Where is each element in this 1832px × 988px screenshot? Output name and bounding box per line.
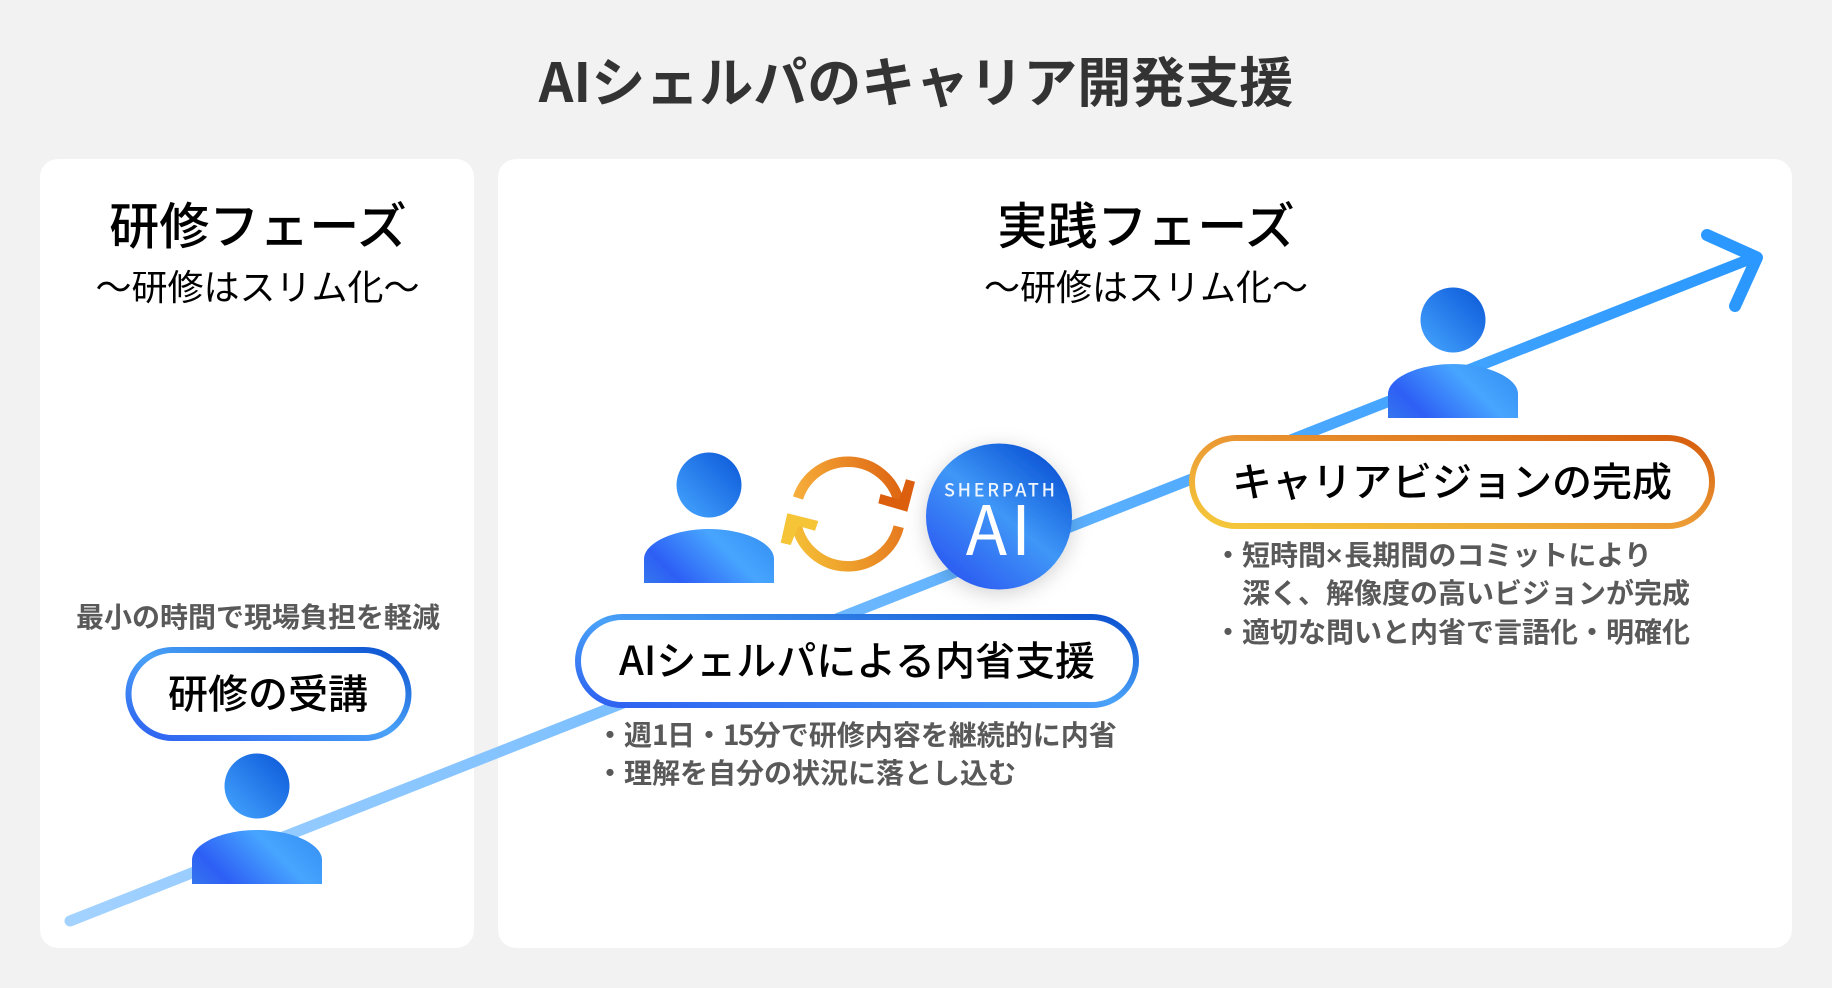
caption: training: 最小の時間で現場負担を軽減 (76, 596, 440, 636)
heading: practice phase: 実践フェーズ (997, 187, 1295, 259)
bullets: career vision: ・短時間×長期間のコミットにより (1214, 534, 1652, 574)
icon: sync arrows (781, 462, 915, 566)
bullets: reflection support: ・理解を自分の状況に落とし込む (596, 752, 1016, 792)
heading: training phase: 研修フェーズ (109, 187, 407, 259)
growth arrow (70, 235, 1757, 921)
pill: reflection support: AIシェルパによる内省支援 (619, 629, 1095, 687)
icon: Sherpath AI badge (926, 444, 1072, 590)
icon: person training (192, 754, 322, 884)
bullets: reflection support (596, 714, 1117, 792)
icon: person reflecting (644, 452, 774, 583)
icon: person career vision (1388, 288, 1518, 418)
pill: reflection support (578, 617, 1136, 705)
panel: training phase (40, 159, 474, 948)
subheading: practice phase: 〜研修はスリム化〜 (984, 259, 1308, 311)
bullets: career vision: 深く、解像度の高いビジョンが完成 (1242, 572, 1690, 612)
pill: training (128, 650, 408, 738)
pill: career vision (1192, 438, 1712, 526)
bullets: career vision: ・適切な問いと内省で言語化・明確化 (1214, 611, 1690, 651)
subheading: training phase: 〜研修はスリム化〜 (95, 259, 420, 311)
icon: Sherpath AI badge: SHERPATH (944, 477, 1055, 503)
panel: practice phase (498, 159, 1792, 948)
bullets: career vision (1214, 534, 1690, 651)
pill: training: 研修の受講 (168, 662, 368, 720)
pill: career vision: キャリアビジョンの完成 (1232, 450, 1672, 508)
icon: Sherpath AI badge: AI (966, 476, 1035, 575)
title: AIシェルパのキャリア開発支援 (538, 39, 1293, 118)
bullets: reflection support: ・週1日・15分で研修内容を継続的に内省 (596, 714, 1117, 754)
